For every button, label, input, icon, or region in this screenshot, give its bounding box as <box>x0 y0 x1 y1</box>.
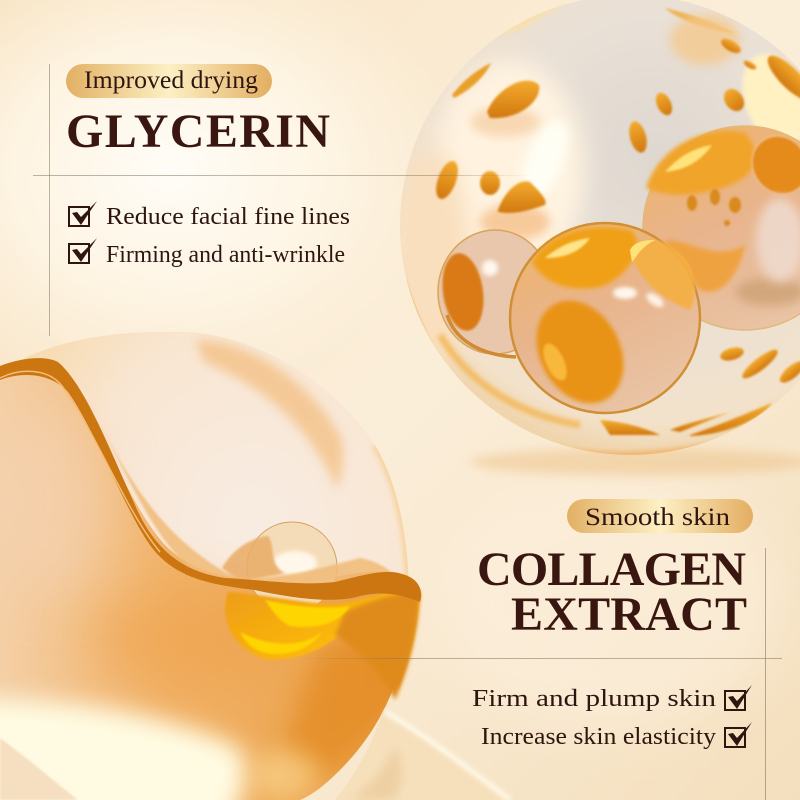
droplet glow <box>470 107 540 137</box>
warm glow band <box>438 59 590 250</box>
heading: collagen extract <box>477 543 747 641</box>
benefit: increase skin elasticity: Increase skin elasticity <box>481 724 716 750</box>
golden pool <box>225 590 420 690</box>
benefit: firm and plump skin: Firm and plump skin <box>472 686 716 712</box>
lower amber sphere <box>0 332 510 800</box>
panel: collagen extract <box>472 499 753 750</box>
sphere base <box>0 332 409 800</box>
glossy translucent wave <box>85 395 392 590</box>
upper right glow <box>742 54 800 140</box>
benefit: reduce facial fine lines: Reduce facial fine lines <box>106 204 350 230</box>
glass base <box>400 0 800 455</box>
pedestal <box>335 712 510 800</box>
upper glass sphere <box>394 0 800 470</box>
rim gold streaks <box>406 279 713 455</box>
inner sphere shading <box>0 340 425 800</box>
small bubble <box>222 522 337 612</box>
left small bubble <box>438 230 552 357</box>
pill: smooth skin <box>567 499 753 533</box>
front large bubble <box>510 223 700 418</box>
amber wave edge <box>0 358 421 602</box>
pool highlights <box>240 600 350 654</box>
heading: glycerin: GLYCERIN <box>66 105 330 158</box>
pill: improved drying <box>66 64 272 98</box>
heading: collagen extract: COLLAGEN <box>477 543 746 596</box>
heading: collagen extract: EXTRACT <box>511 588 747 641</box>
benefit: firm and plump skin <box>472 685 752 712</box>
pill: smooth skin: Smooth skin <box>585 504 731 531</box>
lower left ledge <box>0 738 78 800</box>
right amber body of the lip <box>335 592 420 700</box>
floating gold droplets <box>432 36 800 436</box>
benefit: firming and anti-wrinkle: Firming and anti-wrinkle <box>106 242 345 268</box>
panel: glycerin <box>66 64 350 268</box>
right large bubble <box>643 125 800 330</box>
pill: improved drying: Improved drying <box>84 67 259 94</box>
